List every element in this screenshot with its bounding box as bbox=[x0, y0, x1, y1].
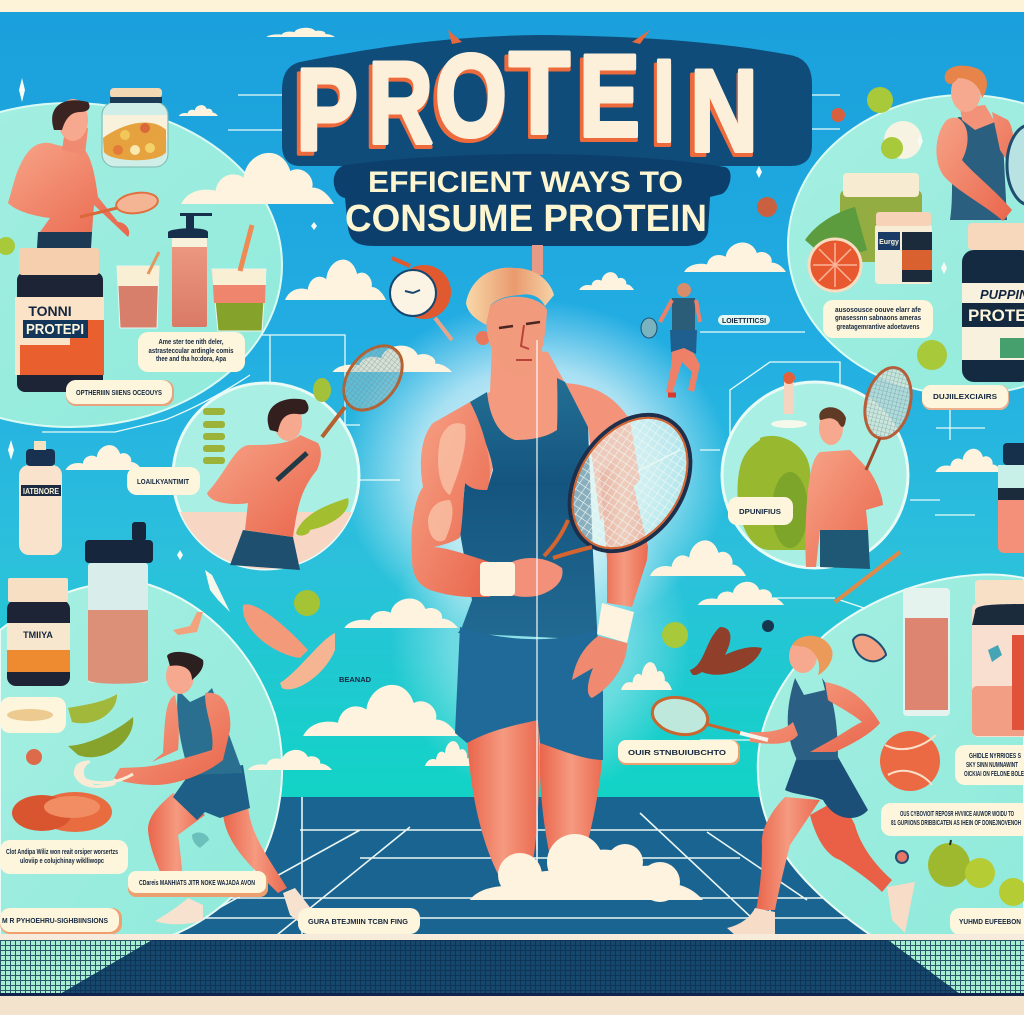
label: dujiil bbox=[922, 385, 1009, 410]
subtitle line 1: EFFICIENT WAYS TO bbox=[368, 166, 683, 199]
bottle label: IATBNORE bbox=[23, 487, 60, 496]
label: middle left: LOAILKYANTIMIT bbox=[137, 479, 190, 486]
title: PROTEIN: T bbox=[509, 27, 570, 158]
label: court bottom bbox=[298, 908, 420, 934]
label: optimum: OPTHERIIIN SIIENS OCEOUYS bbox=[76, 390, 162, 397]
top right player bbox=[936, 66, 1024, 221]
left arm bbox=[411, 402, 490, 597]
title: PROTEIN: E bbox=[575, 34, 640, 165]
tennis net bbox=[0, 934, 1024, 1015]
racket bbox=[544, 392, 715, 574]
protein tub bottom left bbox=[7, 578, 70, 686]
label: bottom right top bbox=[955, 745, 1024, 785]
panel: middle right circle bbox=[722, 382, 908, 568]
label: top right text: ausosousce oouve elarr afe bbox=[835, 307, 921, 314]
central player bbox=[411, 268, 715, 878]
label: bottom left center bbox=[128, 871, 268, 897]
small tub bbox=[875, 212, 932, 284]
tennis court bbox=[170, 797, 870, 935]
label: top right text bbox=[823, 300, 933, 338]
label: optimum bbox=[66, 380, 174, 406]
label: dujiil: DUJIILEXCIAIRS bbox=[933, 394, 997, 401]
panel: bottom right circle bbox=[758, 575, 1024, 936]
floating food bbox=[173, 570, 886, 689]
label: TMIIYA bbox=[23, 630, 53, 640]
central white glow bbox=[340, 300, 730, 640]
label: bottom right lower: YUHMD EUFEEBON bbox=[959, 919, 1021, 926]
title: PROTEIN: O bbox=[435, 30, 507, 161]
tennis balls top right bbox=[0, 87, 947, 370]
subtitle line 2: CONSUME PROTEIN bbox=[345, 198, 707, 240]
label: ouir bbox=[618, 740, 740, 765]
bottle left bbox=[19, 441, 62, 555]
protein tub left: PROTEPI bbox=[26, 321, 84, 338]
middle left player bbox=[203, 335, 414, 570]
title: PROTEIN: N bbox=[685, 49, 758, 180]
panel: top left circle bbox=[0, 103, 282, 427]
tank top bbox=[458, 378, 597, 640]
left wristband bbox=[480, 562, 515, 596]
racket decor bbox=[835, 552, 900, 602]
label: top left text: thee and tha ho:dora, Apa bbox=[156, 356, 226, 363]
title plaque bbox=[282, 35, 812, 166]
avocado and foods bbox=[0, 694, 133, 832]
neck and chest bbox=[465, 345, 565, 490]
label: top left text: astrasteccular ardingle comis bbox=[148, 348, 234, 355]
left leg bbox=[467, 710, 539, 878]
sparkles bbox=[8, 78, 947, 560]
small tub text: Eurgy bbox=[879, 239, 899, 246]
grapefruit bbox=[809, 239, 861, 291]
lower white glow bbox=[390, 480, 690, 800]
label: bottom left text: uloviip e colujchinay wiklliwopc bbox=[20, 858, 104, 865]
bottom right player bbox=[649, 636, 915, 935]
label: bean: BEANAD bbox=[339, 677, 371, 684]
label: bottom left text bbox=[0, 840, 128, 874]
panel: top right circle bbox=[788, 95, 1024, 395]
title: PROTEIN: E bbox=[579, 30, 640, 161]
label: dpunifius: DPUNIFIUS bbox=[739, 509, 781, 516]
title: PROTEIN: T bbox=[505, 31, 570, 162]
arm muscle highlight bbox=[428, 423, 466, 541]
label: bottom left lower bbox=[0, 908, 122, 934]
apples and balls bbox=[896, 840, 1024, 906]
label: middle left bbox=[127, 467, 200, 495]
clouds bbox=[66, 28, 1002, 770]
shaker bottle top bbox=[168, 213, 212, 327]
right leg bbox=[540, 740, 603, 878]
distant player bbox=[641, 283, 700, 395]
label: bottom right middle bbox=[881, 803, 1024, 836]
glass right bbox=[212, 225, 266, 331]
bottom left player bbox=[76, 652, 312, 924]
label: top left text bbox=[138, 332, 245, 372]
top cream border bbox=[0, 0, 1024, 12]
label: small statistics: LOIETTITICSI bbox=[722, 318, 766, 325]
title: PROTEIN: R bbox=[364, 41, 433, 172]
jar of nuts bbox=[102, 88, 168, 167]
label: top right text: greatagemrantive adoetavens bbox=[836, 324, 920, 331]
panel: bottom left circle bbox=[0, 582, 282, 936]
title: PROTEIN: I bbox=[653, 35, 675, 166]
title: PROTEIN: N bbox=[690, 45, 758, 176]
protein tub bottom right bbox=[972, 580, 1024, 737]
label: top right text: gnasessnn sabnaons ameras bbox=[835, 315, 921, 322]
title: PROTEIN: P bbox=[292, 48, 357, 179]
title: PROTEIN: I bbox=[649, 39, 676, 170]
tub label text: TONNI bbox=[28, 303, 72, 319]
leaves bbox=[805, 207, 867, 262]
title: PROTEIN bbox=[292, 27, 758, 180]
label: ouir: OUIR STNBUIUBCHTO bbox=[628, 750, 727, 757]
right wristband bbox=[597, 603, 634, 643]
protein tub left bbox=[15, 248, 104, 392]
label: top left text: Ame ster toe nith deler, bbox=[158, 339, 224, 346]
cloud: base of player bbox=[470, 834, 703, 902]
label: bottom left lower: M R PYHOEHRU-SIGHBIINSIONS bbox=[2, 918, 108, 925]
top left player bbox=[8, 99, 159, 248]
subtitle plaque bbox=[334, 154, 731, 246]
label: court bottom: GURA BTEJMIIN TCBN FING bbox=[308, 919, 409, 926]
title: PROTEIN: P bbox=[296, 44, 358, 175]
right shoulder bbox=[565, 383, 640, 520]
shorts bbox=[455, 627, 603, 760]
label: bottom left text: Clot Andipa Wiliz won reait orsiper worsertzs bbox=[6, 849, 118, 856]
label: small statistics bbox=[718, 315, 770, 325]
orange pins bbox=[448, 30, 650, 44]
label: dpunifius bbox=[728, 497, 793, 525]
panel: middle left circle bbox=[170, 383, 360, 574]
label: bottom right lower bbox=[950, 908, 1024, 935]
pole below plaque bbox=[532, 245, 543, 275]
icon: orange tennis ball bbox=[880, 731, 940, 791]
center divider line bbox=[536, 340, 538, 850]
right arm bbox=[600, 450, 648, 607]
title: PROTEIN: R bbox=[368, 37, 433, 168]
left hand bbox=[512, 558, 563, 597]
label: bottom left center: CDareis MANHIATS JITR NOKE WAJADA AVON bbox=[139, 880, 255, 887]
protein tub right bbox=[962, 223, 1024, 382]
right hand bbox=[572, 636, 627, 698]
icon: clock bbox=[390, 258, 452, 340]
circuit lines bbox=[42, 95, 985, 740]
shaker large bbox=[85, 522, 153, 684]
glass left bbox=[117, 252, 159, 328]
title: PROTEIN: O bbox=[431, 34, 507, 165]
head bbox=[466, 268, 554, 378]
bottle right bbox=[998, 443, 1024, 553]
glass bottom right bbox=[903, 588, 950, 716]
middle right player bbox=[737, 363, 918, 569]
green jar bbox=[840, 173, 922, 262]
